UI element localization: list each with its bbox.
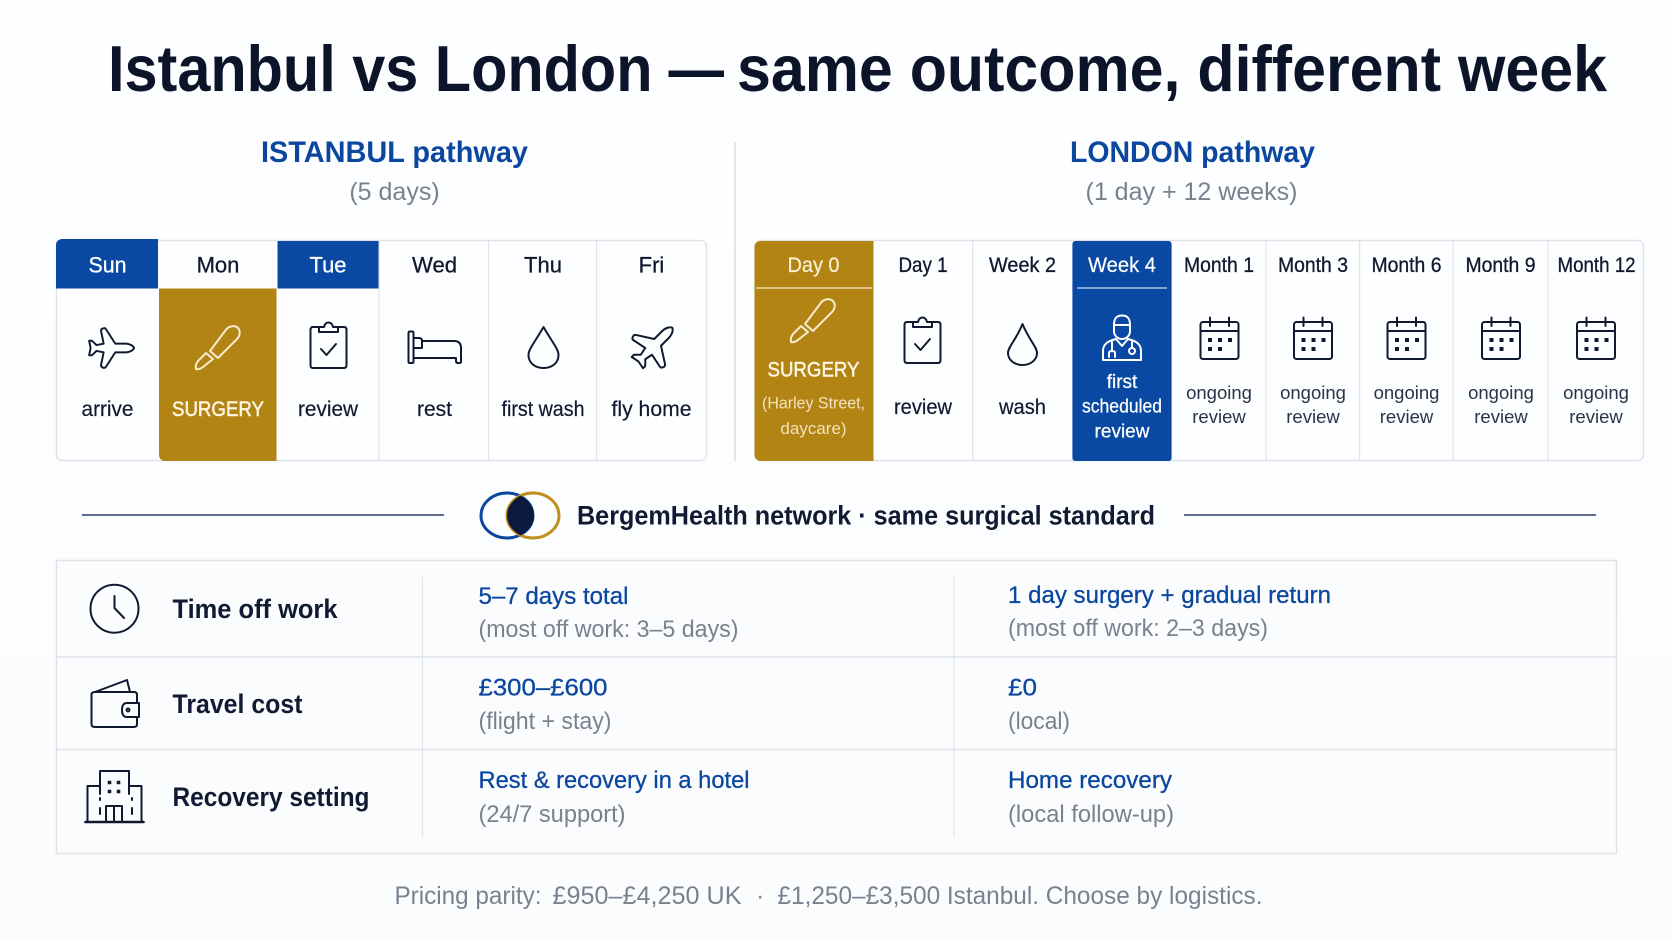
stage: Day 0 surgery: (Harley Street, bbox=[762, 394, 865, 412]
day: Monday surgery bbox=[159, 252, 276, 461]
stage: Day 0 surgery bbox=[754, 241, 874, 461]
day: Thursday: Thu bbox=[524, 252, 562, 278]
heading: London pathway: (1 day + 12 weeks) bbox=[1086, 178, 1298, 206]
day: Sunday: Sun bbox=[88, 252, 126, 278]
stage: Week 4 first scheduled review: first bbox=[1107, 372, 1138, 393]
stage: Month 3: ongoing bbox=[1280, 382, 1346, 403]
stage: Month 1: ongoing bbox=[1186, 382, 1252, 403]
stage: Month 12 bbox=[1558, 254, 1636, 427]
comparison table bbox=[56, 560, 1616, 854]
day: Sunday: arrive bbox=[82, 398, 134, 421]
stage: Week 2 bbox=[989, 254, 1056, 419]
day: Friday bbox=[612, 252, 692, 421]
row: travel cost bbox=[92, 674, 1070, 735]
stage: Month 9: Month 9 bbox=[1466, 254, 1536, 277]
row: travel cost: (flight + stay) bbox=[478, 708, 612, 735]
heading: London pathway: LONDON pathway bbox=[1070, 136, 1315, 169]
row: recovery setting: (local follow-up) bbox=[1008, 801, 1174, 828]
stage: Month 9 bbox=[1466, 254, 1536, 427]
stage: Month 1 bbox=[1184, 254, 1254, 427]
heading: Istanbul pathway: ISTANBUL pathway bbox=[261, 136, 528, 169]
day: Tuesday bbox=[278, 241, 378, 421]
row: recovery setting: Rest & recovery in a hotel bbox=[478, 767, 750, 794]
stage: Month 9: ongoing bbox=[1468, 382, 1534, 403]
day: Thursday: first wash bbox=[502, 398, 584, 421]
row: time off work bbox=[90, 582, 1331, 643]
day: Friday: Fri bbox=[639, 252, 664, 278]
day: Wednesday bbox=[408, 252, 461, 421]
stage: Month 1: Month 1 bbox=[1184, 254, 1254, 277]
row: travel cost: £0 bbox=[1008, 674, 1037, 702]
stage: Month 6: review bbox=[1380, 406, 1434, 427]
title: — bbox=[668, 32, 724, 105]
icon: hotel building bbox=[86, 771, 144, 822]
stage: Month 6: ongoing bbox=[1374, 382, 1439, 403]
stage: Month 6 bbox=[1372, 254, 1442, 427]
day: Sunday bbox=[56, 239, 158, 421]
day: Thursday bbox=[502, 252, 584, 421]
stage: Month 12: ongoing bbox=[1563, 382, 1629, 403]
icon: overlapping circles logo bbox=[481, 493, 559, 538]
heading: Istanbul pathway: (5 days) bbox=[349, 178, 440, 206]
day: Wednesday: Wed bbox=[412, 252, 457, 278]
day: Wednesday: rest bbox=[417, 398, 452, 421]
stage: Week 4 first scheduled review: review bbox=[1095, 422, 1150, 442]
stage: Month 9: review bbox=[1474, 406, 1528, 427]
stage: Week 2: wash bbox=[998, 396, 1046, 419]
stage: Day 0 surgery: SURGERY bbox=[768, 358, 860, 382]
footer note: £1,250–£3,500 Istanbul. Choose by logistics. bbox=[778, 882, 1262, 910]
footer note: Pricing parity: bbox=[394, 882, 542, 910]
row: time off work: (most off work: 2–3 days) bbox=[1008, 615, 1268, 642]
stage: Month 6: Month 6 bbox=[1372, 254, 1442, 277]
row: recovery setting: (24/7 support) bbox=[478, 801, 626, 828]
icon: clock bbox=[90, 585, 138, 633]
stage: Day 0 surgery: Day 0 bbox=[788, 254, 840, 277]
title bbox=[108, 32, 1608, 105]
title: same outcome, different week bbox=[737, 32, 1608, 105]
footer note: · bbox=[756, 882, 764, 910]
stage: Month 3 bbox=[1278, 254, 1348, 427]
row: recovery setting bbox=[86, 767, 1174, 828]
heading: Istanbul pathway bbox=[261, 136, 528, 206]
row: travel cost: (local) bbox=[1008, 708, 1070, 735]
row: time off work: (most off work: 3–5 days) bbox=[478, 616, 738, 643]
day: Tuesday: Tue bbox=[309, 252, 347, 278]
day: Monday surgery: Mon bbox=[197, 252, 239, 278]
footer note bbox=[394, 882, 1262, 910]
stage: Week 4 first scheduled review bbox=[1072, 241, 1172, 461]
stage: Week 4 first scheduled review: Week 4 bbox=[1088, 254, 1156, 277]
stage: Month 3: Month 3 bbox=[1278, 254, 1348, 277]
title: Istanbul vs London bbox=[108, 32, 652, 105]
row: travel cost: Travel cost bbox=[172, 689, 303, 719]
row: time off work: Time off work bbox=[172, 594, 338, 624]
network banner: BergemHealth network · same surgical standard bbox=[577, 500, 1155, 530]
day: Tuesday: review bbox=[298, 398, 359, 421]
network banner bbox=[481, 493, 1155, 538]
row: time off work: 1 day surgery + gradual return bbox=[1008, 582, 1331, 609]
stage: Day 1 bbox=[894, 254, 953, 419]
stage: Day 1: review bbox=[894, 396, 953, 419]
row: recovery setting: Recovery setting bbox=[172, 782, 370, 812]
stage: Month 1: review bbox=[1192, 406, 1246, 427]
stage: Day 0 surgery: daycare) bbox=[780, 419, 847, 438]
panel: Istanbul timeline bbox=[56, 239, 706, 461]
row: recovery setting: Home recovery bbox=[1008, 767, 1173, 794]
panel: London timeline bbox=[754, 240, 1644, 461]
day: Friday: fly home bbox=[612, 398, 692, 421]
heading: London pathway bbox=[1070, 136, 1315, 206]
stage: Week 4 first scheduled review: scheduled bbox=[1082, 396, 1162, 418]
icon: wallet bbox=[92, 680, 139, 727]
stage: Month 3: review bbox=[1286, 406, 1340, 427]
stage: Day 1: Day 1 bbox=[898, 254, 948, 277]
day: Monday surgery: SURGERY bbox=[172, 398, 264, 421]
stage: Month 12: review bbox=[1569, 406, 1623, 427]
stage: Month 12: Month 12 bbox=[1558, 254, 1636, 277]
stage: Week 2: Week 2 bbox=[989, 254, 1056, 277]
row: time off work: 5–7 days total bbox=[478, 583, 628, 610]
row: travel cost: £300–£600 bbox=[478, 674, 608, 702]
footer note: £950–£4,250 UK bbox=[552, 882, 742, 910]
